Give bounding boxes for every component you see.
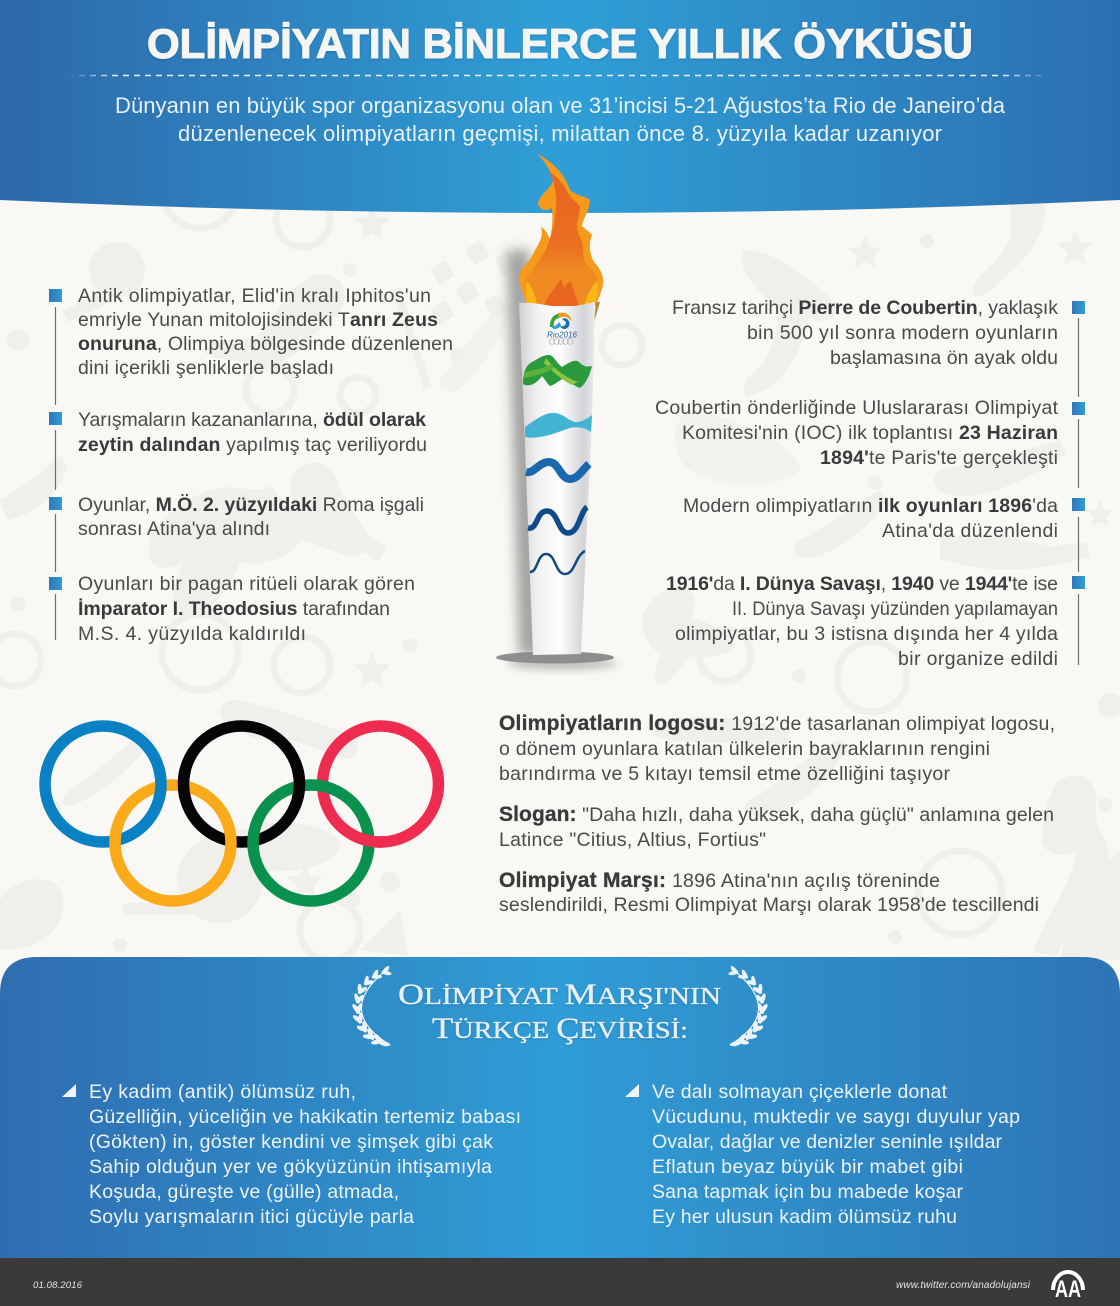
slogan text: Latince "Citius, Altius, Fortius" xyxy=(499,829,766,851)
anthem left column: Ey kadim (antik) ölümsüz ruh, xyxy=(89,1081,356,1103)
left text: Theodosius xyxy=(78,573,415,645)
icon: left laurel xyxy=(351,965,392,1046)
background sport silhouettes xyxy=(0,201,1120,960)
source url: www.twitter.com/anadolujansi xyxy=(896,1280,1031,1291)
wrestlers xyxy=(220,700,358,759)
left text: Oyunlar: sonrası Atina'ya alındı xyxy=(78,518,270,540)
bottom panel background xyxy=(0,957,1120,1260)
anthem text: Olimpiyat Marşı: 1896 Atina'nın açılış töreninde xyxy=(499,869,940,892)
logo text xyxy=(499,712,1055,785)
rio 2016 logo: Rio2016 xyxy=(547,330,578,340)
left text: Oyunlar xyxy=(78,493,424,540)
light blue wave xyxy=(525,413,592,438)
icon: right laurel xyxy=(728,965,769,1046)
logo text: Olimpiyatların logosu: 1912'de tasarlanan olimpiyat logosu, xyxy=(499,712,1055,735)
anthem right column: Ve dalı solmayan çiçeklerle donat xyxy=(652,1081,948,1103)
anthem right column: Vücudunu, muktedir ve saygı duyulur yap xyxy=(652,1106,1020,1128)
header band xyxy=(0,0,1120,213)
icon: AA logo: AA xyxy=(1055,1276,1081,1303)
green leaves band xyxy=(523,355,592,388)
left timeline lines xyxy=(54,307,56,640)
torch back tab xyxy=(594,302,600,322)
subtitle: Dünyanın en büyük spor organizasyonu olan ve 31’incisi 5-21 Ağustos’ta Rio de Janeiro’da xyxy=(115,93,1006,118)
slogan text: Slogan: "Daha hızlı, daha yüksek, daha güçlü" anlamına gelen xyxy=(499,803,1054,826)
right timeline lines xyxy=(1078,318,1080,665)
cyclist left xyxy=(205,274,345,365)
anthem right column: Eflatun beyaz büyük bir mabet gibi xyxy=(652,1156,963,1178)
anthem text xyxy=(499,869,1039,916)
left text: Yarışmalar xyxy=(78,409,427,456)
left text: Theodosius: M.S. 4. yüzyılda kaldırıldı xyxy=(78,623,306,645)
left text: Antik olimpiyatlar: onuruna, Olimpiya bölgesinde düzenlenen xyxy=(78,333,453,355)
anthem heading xyxy=(398,978,721,1045)
anthem right column xyxy=(652,1081,1020,1228)
right text: IOC: Coubertin önderliğinde Uluslararası Olimpiyat xyxy=(655,397,1059,419)
anthem left column: (Gökten) in, göster kendini ve şimşek gibi çak xyxy=(89,1131,493,1153)
panel: right timeline xyxy=(655,297,1085,670)
left text: Yarışmalar: Yarışmaların kazananlarına, ödül olarak xyxy=(78,409,426,431)
footer xyxy=(0,1258,1120,1306)
right text: Coubertin: başlamasına ön ayak oldu xyxy=(830,347,1058,369)
right text: first games: Atina'da düzenlendi xyxy=(882,520,1058,542)
icon: right triangle xyxy=(625,1084,639,1097)
anthem left column xyxy=(89,1081,521,1228)
subtitle xyxy=(115,93,1006,146)
anthem text: seslendirildi, Resmi Olimpiyat Marşı olarak 1958'de tescillendi xyxy=(499,894,1039,916)
anthem heading: OLİMPİYAT MARŞI'NIN xyxy=(398,978,721,1011)
right text: IOC: Komitesi'nin (IOC) ilk toplantısı 23 Haziran xyxy=(682,422,1058,444)
right text: wars xyxy=(666,573,1058,670)
title: OLİMPİYATIN BİNLERCE YILLIK ÖYKÜSÜ xyxy=(147,20,973,67)
anthem right column: Ovalar, dağlar ve denizler seninle ışıldar xyxy=(652,1131,1002,1153)
anthem left column: Koşuda, güreşte ve (gülle) atmada, xyxy=(89,1181,399,1203)
left text: Antik olimpiyatlar: Antik olimpiyatlar, Elid'in kralı Iphitos'un xyxy=(78,285,431,307)
right timeline markers xyxy=(1072,301,1085,589)
torch xyxy=(496,154,617,670)
right text: Coubertin xyxy=(672,297,1058,369)
left text: Antik olimpiyatlar xyxy=(78,285,453,379)
right text: Coubertin: Fransız tarihçi Pierre de Coubertin, yaklaşık xyxy=(672,297,1058,319)
anthem left column: Sahip olduğun yer ve gökyüzünün ihtişamıyla xyxy=(89,1156,492,1178)
left text: Yarışmalar: zeytin dalından yapılmış taç veriliyordu xyxy=(78,434,427,456)
torch base xyxy=(496,652,614,664)
anthem heading: TÜRKÇE ÇEVİRİSİ: xyxy=(432,1012,688,1045)
left text: Antik olimpiyatlar: emriyle Yunan mitolojisindeki Tanrı Zeus xyxy=(78,309,438,331)
olympic rings xyxy=(45,726,438,901)
left timeline markers xyxy=(49,289,62,590)
right text: wars: olimpiyatlar, bu 3 istisna dışında her 4 yılda xyxy=(675,623,1058,645)
panel: logo slogan and anthem text xyxy=(499,712,1055,916)
cyclist right xyxy=(642,587,735,684)
panel: left timeline xyxy=(49,285,453,645)
flame xyxy=(519,154,603,306)
anthem right column: Ey her ulusun kadim ölümsüz ruhu xyxy=(652,1206,957,1228)
background ring shapes xyxy=(0,152,1002,960)
torch shadow xyxy=(507,250,542,655)
anthem left column: Güzelliğin, yüceliğin ve hakikatin tertemiz babası xyxy=(89,1106,521,1128)
right text: wars: 1916'da I. Dünya Savaşı, 1940 ve 1944'te ise xyxy=(666,573,1058,595)
torch body xyxy=(519,302,595,655)
right text: Coubertin: bin 500 yıl sonra modern oyunların xyxy=(747,322,1058,344)
runner top right xyxy=(973,201,1045,297)
blue waves xyxy=(526,462,589,479)
logo text: barındırma ve 5 kıtayı temsil etme özelliğini taşıyor xyxy=(499,763,950,785)
left text: Theodosius: Oyunları bir pagan ritüeli olarak gören xyxy=(78,573,415,595)
icon: AA logo xyxy=(1053,1272,1083,1303)
rio 2016 logo xyxy=(547,313,578,344)
subtitle: düzenlenecek olimpiyatların geçmişi, milattan önce 8. yüzyıla kadar uzanıyor xyxy=(178,121,942,146)
right text: wars: II. Dünya Savaşı yüzünden yapılamayan xyxy=(732,598,1058,620)
right text: first games xyxy=(683,495,1058,542)
slogan text xyxy=(499,803,1054,851)
panel: anthem translation xyxy=(0,957,1120,1260)
right text: IOC: 1894'te Paris'te gerçekleşti xyxy=(820,447,1058,469)
logo text: o dönem oyunlara katılan ülkelerin bayraklarının rengini xyxy=(499,738,990,760)
date: 01.08.2016 xyxy=(33,1280,83,1291)
footer bar xyxy=(0,1258,1120,1306)
anthem left column: Soylu yarışmaların itici gücüyle parla xyxy=(89,1206,414,1228)
right text: IOC xyxy=(655,397,1059,469)
right text: wars: bir organize edildi xyxy=(898,648,1058,670)
left text: Antik olimpiyatlar: dini içerikli şenliklerle başladı xyxy=(78,357,334,379)
torch base shadow xyxy=(507,658,617,670)
icon: left triangle xyxy=(62,1084,76,1097)
left text: Oyunlar: Oyunlar, M.Ö. 2. yüzyıldaki Roma işgali xyxy=(78,493,424,516)
right text: first games: Modern olimpiyatların ilk oyunları 1896'da xyxy=(683,495,1058,517)
racket xyxy=(177,837,263,923)
left text: Theodosius: İmparator I. Theodosius tarafından xyxy=(78,597,390,620)
anthem right column: Sana tapmak için bu mabede koşar xyxy=(652,1181,964,1203)
dashed divider xyxy=(68,74,1050,76)
